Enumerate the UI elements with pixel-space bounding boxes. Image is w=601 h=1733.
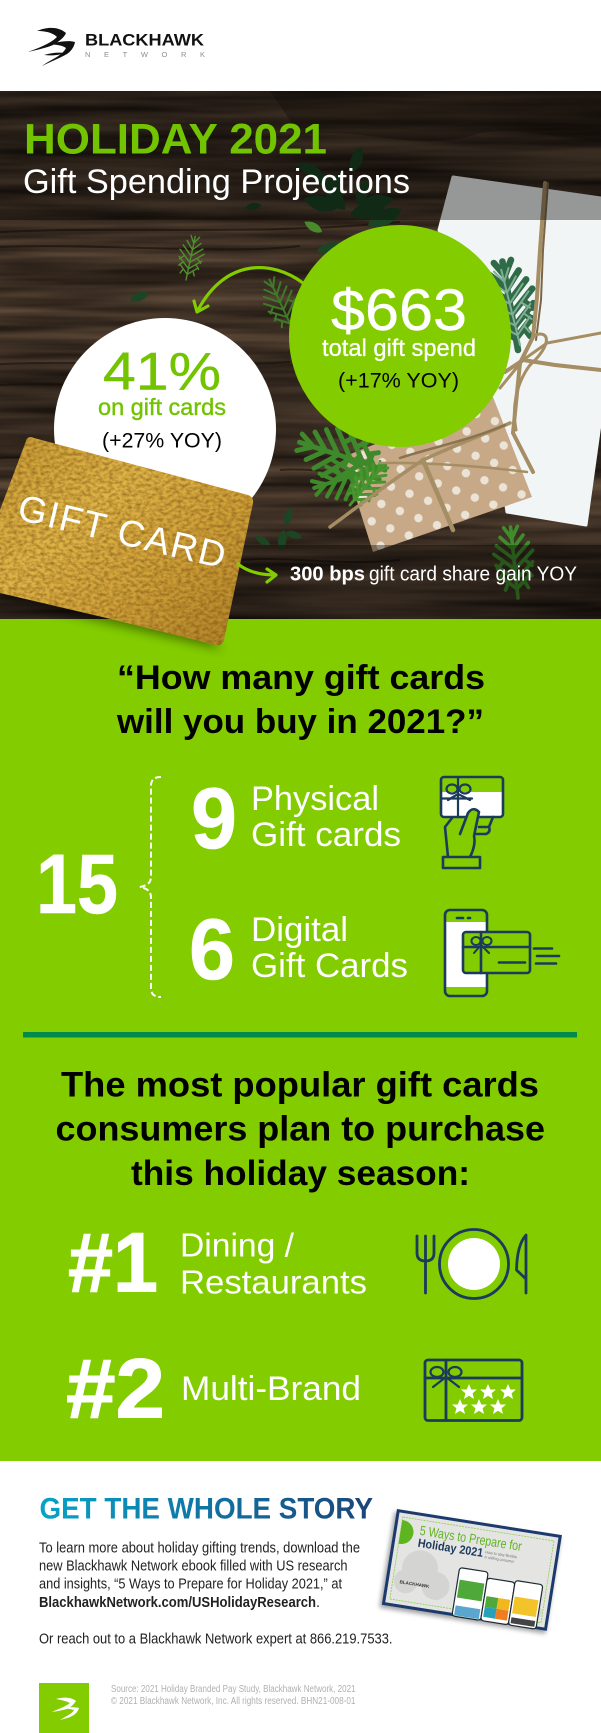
white gift box [439, 177, 601, 525]
rank 2: multi-brand: #2 [66, 1342, 165, 1436]
stat: 6 digital gift cards: 6 [189, 902, 235, 998]
dark green leaves [129, 144, 405, 551]
rank 2: multi-brand: Multi-Brand [181, 1370, 361, 1408]
callout: 41% on gift cards [54, 318, 276, 540]
caption: 300 bps: gift card share gain YOY [369, 564, 577, 586]
stat: 9 physical gift cards: Physical [251, 780, 379, 818]
panel: how many gift cards [0, 619, 601, 1461]
brace [140, 777, 161, 997]
heading: most popular gift cards [56, 1066, 545, 1193]
title: HOLIDAY 2021 [24, 116, 327, 164]
stat: 6 digital gift cards: Digital [251, 911, 348, 949]
callout: 41% on gift cards: (+27% YOY) [102, 430, 222, 452]
callout: 41% on gift cards: 41% [103, 342, 221, 402]
stat: 9 physical gift cards: 9 [191, 771, 237, 867]
source text [111, 1684, 356, 1707]
stat: 6 digital gift cards [189, 902, 408, 998]
caption: 300 bps: 300 bps [290, 564, 365, 586]
callout: $663 total gift spend [289, 225, 511, 447]
title [23, 116, 410, 201]
kraft polka dot gift box [343, 397, 532, 552]
gold gift card [0, 437, 253, 650]
gold gift card: GIFT CARD [14, 487, 230, 576]
stat: 9 physical gift cards [191, 771, 401, 867]
arrow: card to share gain [238, 564, 276, 582]
callout: $663 total gift spend: total gift spend [322, 335, 476, 362]
twine [330, 183, 601, 530]
footer logo mark [39, 1683, 89, 1733]
heading: get the whole story: GET THE WHOLE STORY [40, 1492, 373, 1526]
icon: hand holding gift card [441, 777, 503, 868]
dark header band [0, 91, 601, 220]
arrow: from total spend to gift cards [194, 268, 303, 312]
icon: multi-brand gift card with stars [425, 1360, 522, 1420]
text block: ebook description: new Blackhawk Network ebook filled with US research [39, 1558, 348, 1574]
source text: © 2021 Blackhawk Network, Inc. All rights reserved. BHN21-008-01 [111, 1696, 356, 1707]
logo: Blackhawk Network: NETWORK [85, 50, 205, 59]
source text: Source: 2021 Holiday Branded Pay Study, Blackhawk Network, 2021 [111, 1684, 356, 1695]
evergreen sprigs [174, 234, 542, 600]
ebook cover [379, 1509, 562, 1634]
dark caption band [0, 545, 601, 619]
ebook cover: Holiday 2021 [417, 1536, 485, 1560]
divider [23, 1032, 577, 1038]
heading: how many gift cards: will you buy in 2021?” [116, 703, 484, 741]
stat: 9 physical gift cards: Gift cards [251, 816, 401, 854]
stat: 6 digital gift cards: Gift Cards [251, 947, 408, 985]
heading: most popular gift cards: The most popular gift cards [61, 1066, 539, 1104]
hero photo: gifts on wood table [0, 91, 601, 619]
rank 1: dining / restaurants [68, 1216, 367, 1310]
ebook cover: How to stay flexible [485, 1549, 518, 1559]
heading: how many gift cards [116, 659, 485, 741]
rank 2: multi-brand [66, 1342, 361, 1436]
callout: $663 total gift spend: (+17% YOY) [338, 370, 459, 392]
total: 15: 15 [36, 837, 118, 931]
rank 1: dining / restaurants: #1 [68, 1216, 158, 1310]
title: Gift Spending Projections [23, 163, 410, 201]
ebook cover: in shifting consumer [484, 1554, 515, 1564]
text block: ebook description: BlackhawkNetwork.com/USHolidayResearch [39, 1595, 316, 1611]
logo: Blackhawk Network: BLACKHAWK [85, 32, 204, 50]
ebook cover: BLACKHAWK [399, 1579, 430, 1589]
ebook cover: 5 Ways to Prepare for [419, 1523, 523, 1554]
text block: ebook description: . [316, 1595, 320, 1611]
text block: ebook description: Or reach out to a Blackhawk Network expert at 866.219.7533. [39, 1632, 392, 1648]
icon: phone with digital card [445, 910, 559, 996]
text block: ebook description [39, 1540, 392, 1648]
callout: $663 total gift spend: $663 [331, 278, 467, 343]
rank 1: dining / restaurants: Dining / [180, 1226, 295, 1264]
rank 1: dining / restaurants: Restaurants [180, 1264, 367, 1300]
logo: Blackhawk Network [28, 28, 205, 66]
text block: ebook description: To learn more about holiday gifting trends, download the [39, 1540, 360, 1556]
icon: plate and cutlery [417, 1230, 526, 1298]
text block: ebook description: and insights, “5 Ways to Prepare for Holiday 2021,” at [39, 1576, 342, 1592]
heading: most popular gift cards: this holiday season: [131, 1154, 470, 1193]
heading: how many gift cards: “How many gift cards [117, 659, 485, 697]
callout: 41% on gift cards: on gift cards [98, 394, 226, 420]
heading: most popular gift cards: consumers plan to purchase [56, 1110, 545, 1148]
